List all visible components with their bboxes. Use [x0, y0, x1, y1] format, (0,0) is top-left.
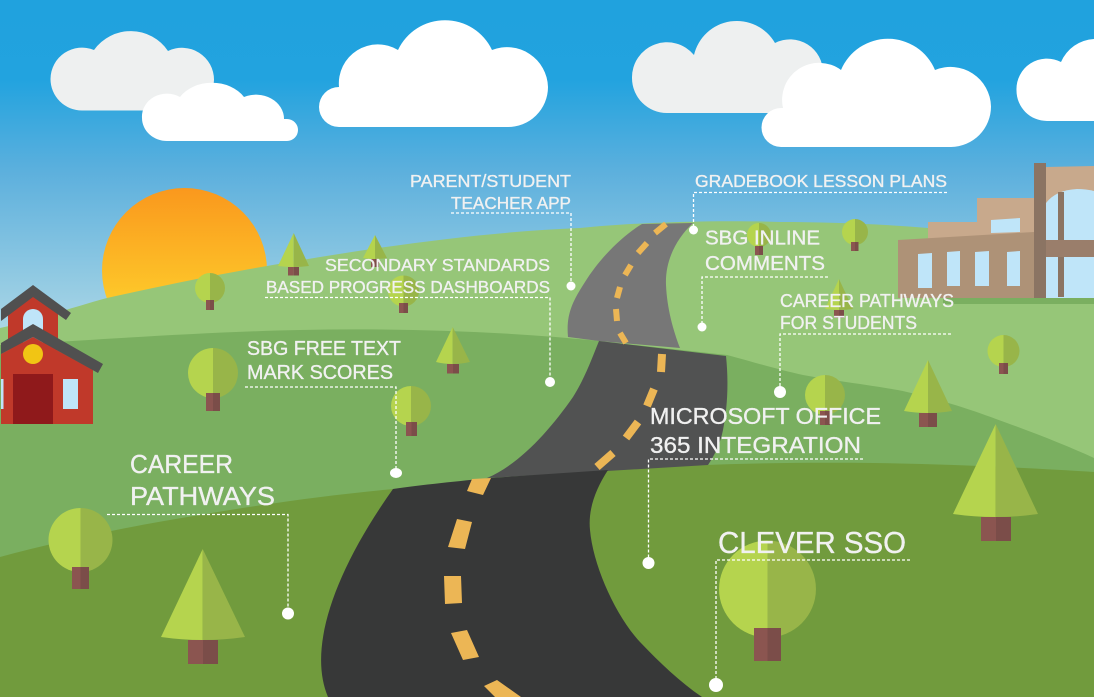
callout: Parent/Student Teacher App: PARENT/STUDENT — [410, 171, 571, 191]
cloud: far right white — [1016, 39, 1094, 121]
callout: Gradebook Lesson Plans — [689, 171, 947, 234]
callout: Parent/Student Teacher App — [410, 171, 576, 290]
callout: SBG Free Text Mark Scores: MARK SCORES — [247, 362, 393, 384]
tree: conifer — [825, 279, 853, 318]
callout: Microsoft Office 365 Integration: MICROSOFT OFFICE — [650, 403, 881, 429]
tree: round — [391, 386, 431, 436]
tree: conifer — [904, 360, 952, 427]
callout: Secondary Standards Based Progress Dashboards — [265, 255, 555, 387]
callout: Gradebook Lesson Plans: GRADEBOOK LESSON PLANS — [695, 171, 947, 191]
callout: Career Pathways — [107, 449, 294, 620]
callout: Clever SSO: CLEVER SSO — [718, 526, 906, 560]
tree: round — [988, 335, 1020, 374]
callout: Microsoft Office 365 Integration — [642, 403, 881, 569]
callout: SBG Free Text Mark Scores — [245, 338, 402, 478]
callout: Parent/Student Teacher App: TEACHER APP — [451, 193, 571, 213]
cloud: left white — [142, 83, 298, 141]
tree: round — [842, 219, 868, 251]
callout: Secondary Standards Based Progress Dashboards: SECONDARY STANDARDS — [325, 255, 550, 275]
callout: Microsoft Office 365 Integration: 365 INTEGRATION — [650, 432, 861, 458]
cloud: right white — [762, 39, 991, 147]
tree: conifer — [363, 235, 387, 267]
callout: Career Pathways for Students — [774, 291, 954, 398]
tree: round — [805, 375, 845, 425]
sky background — [0, 0, 1094, 345]
tree: round — [48, 508, 112, 589]
university building — [898, 163, 1094, 298]
cloud: centre white — [319, 20, 548, 127]
tree: conifer large — [953, 424, 1038, 541]
callout: Career Pathways for Students: CAREER PATHWAYS — [780, 291, 954, 311]
cloud: right grey — [632, 21, 823, 113]
tree: round — [195, 273, 225, 310]
callout: Career Pathways: CAREER — [130, 449, 233, 479]
callout: Clever SSO — [709, 526, 910, 692]
callout: SBG Inline Comments — [698, 228, 828, 332]
schoolhouse — [1, 285, 103, 424]
building lawn strip — [943, 298, 1094, 304]
callout: Career Pathways for Students: FOR STUDENTS — [780, 313, 917, 333]
road: near section — [321, 470, 702, 697]
tree: round — [188, 348, 238, 411]
cloud: far left grey — [50, 31, 214, 111]
road: far section — [568, 223, 693, 348]
tree: round — [388, 276, 419, 313]
sun — [102, 188, 267, 353]
tree: round — [747, 223, 771, 255]
back hill — [0, 221, 1094, 470]
tree: conifer — [278, 233, 309, 276]
callout: SBG Inline Comments: COMMENTS — [705, 253, 825, 275]
middle hill — [0, 329, 1094, 600]
callout: SBG Inline Comments: SBG INLINE — [705, 228, 820, 250]
tree: conifer — [436, 327, 470, 374]
callout: Career Pathways: PATHWAYS — [130, 481, 275, 511]
front hill — [0, 463, 1094, 697]
callout: SBG Free Text Mark Scores: SBG FREE TEXT — [247, 338, 401, 360]
road: middle section — [487, 341, 727, 478]
callout: Secondary Standards Based Progress Dashboards: BASED PROGRESS DASHBOARDS — [266, 277, 550, 297]
tree: round large — [719, 540, 816, 661]
road centre line dashes — [444, 224, 666, 697]
tree: conifer — [161, 549, 245, 664]
